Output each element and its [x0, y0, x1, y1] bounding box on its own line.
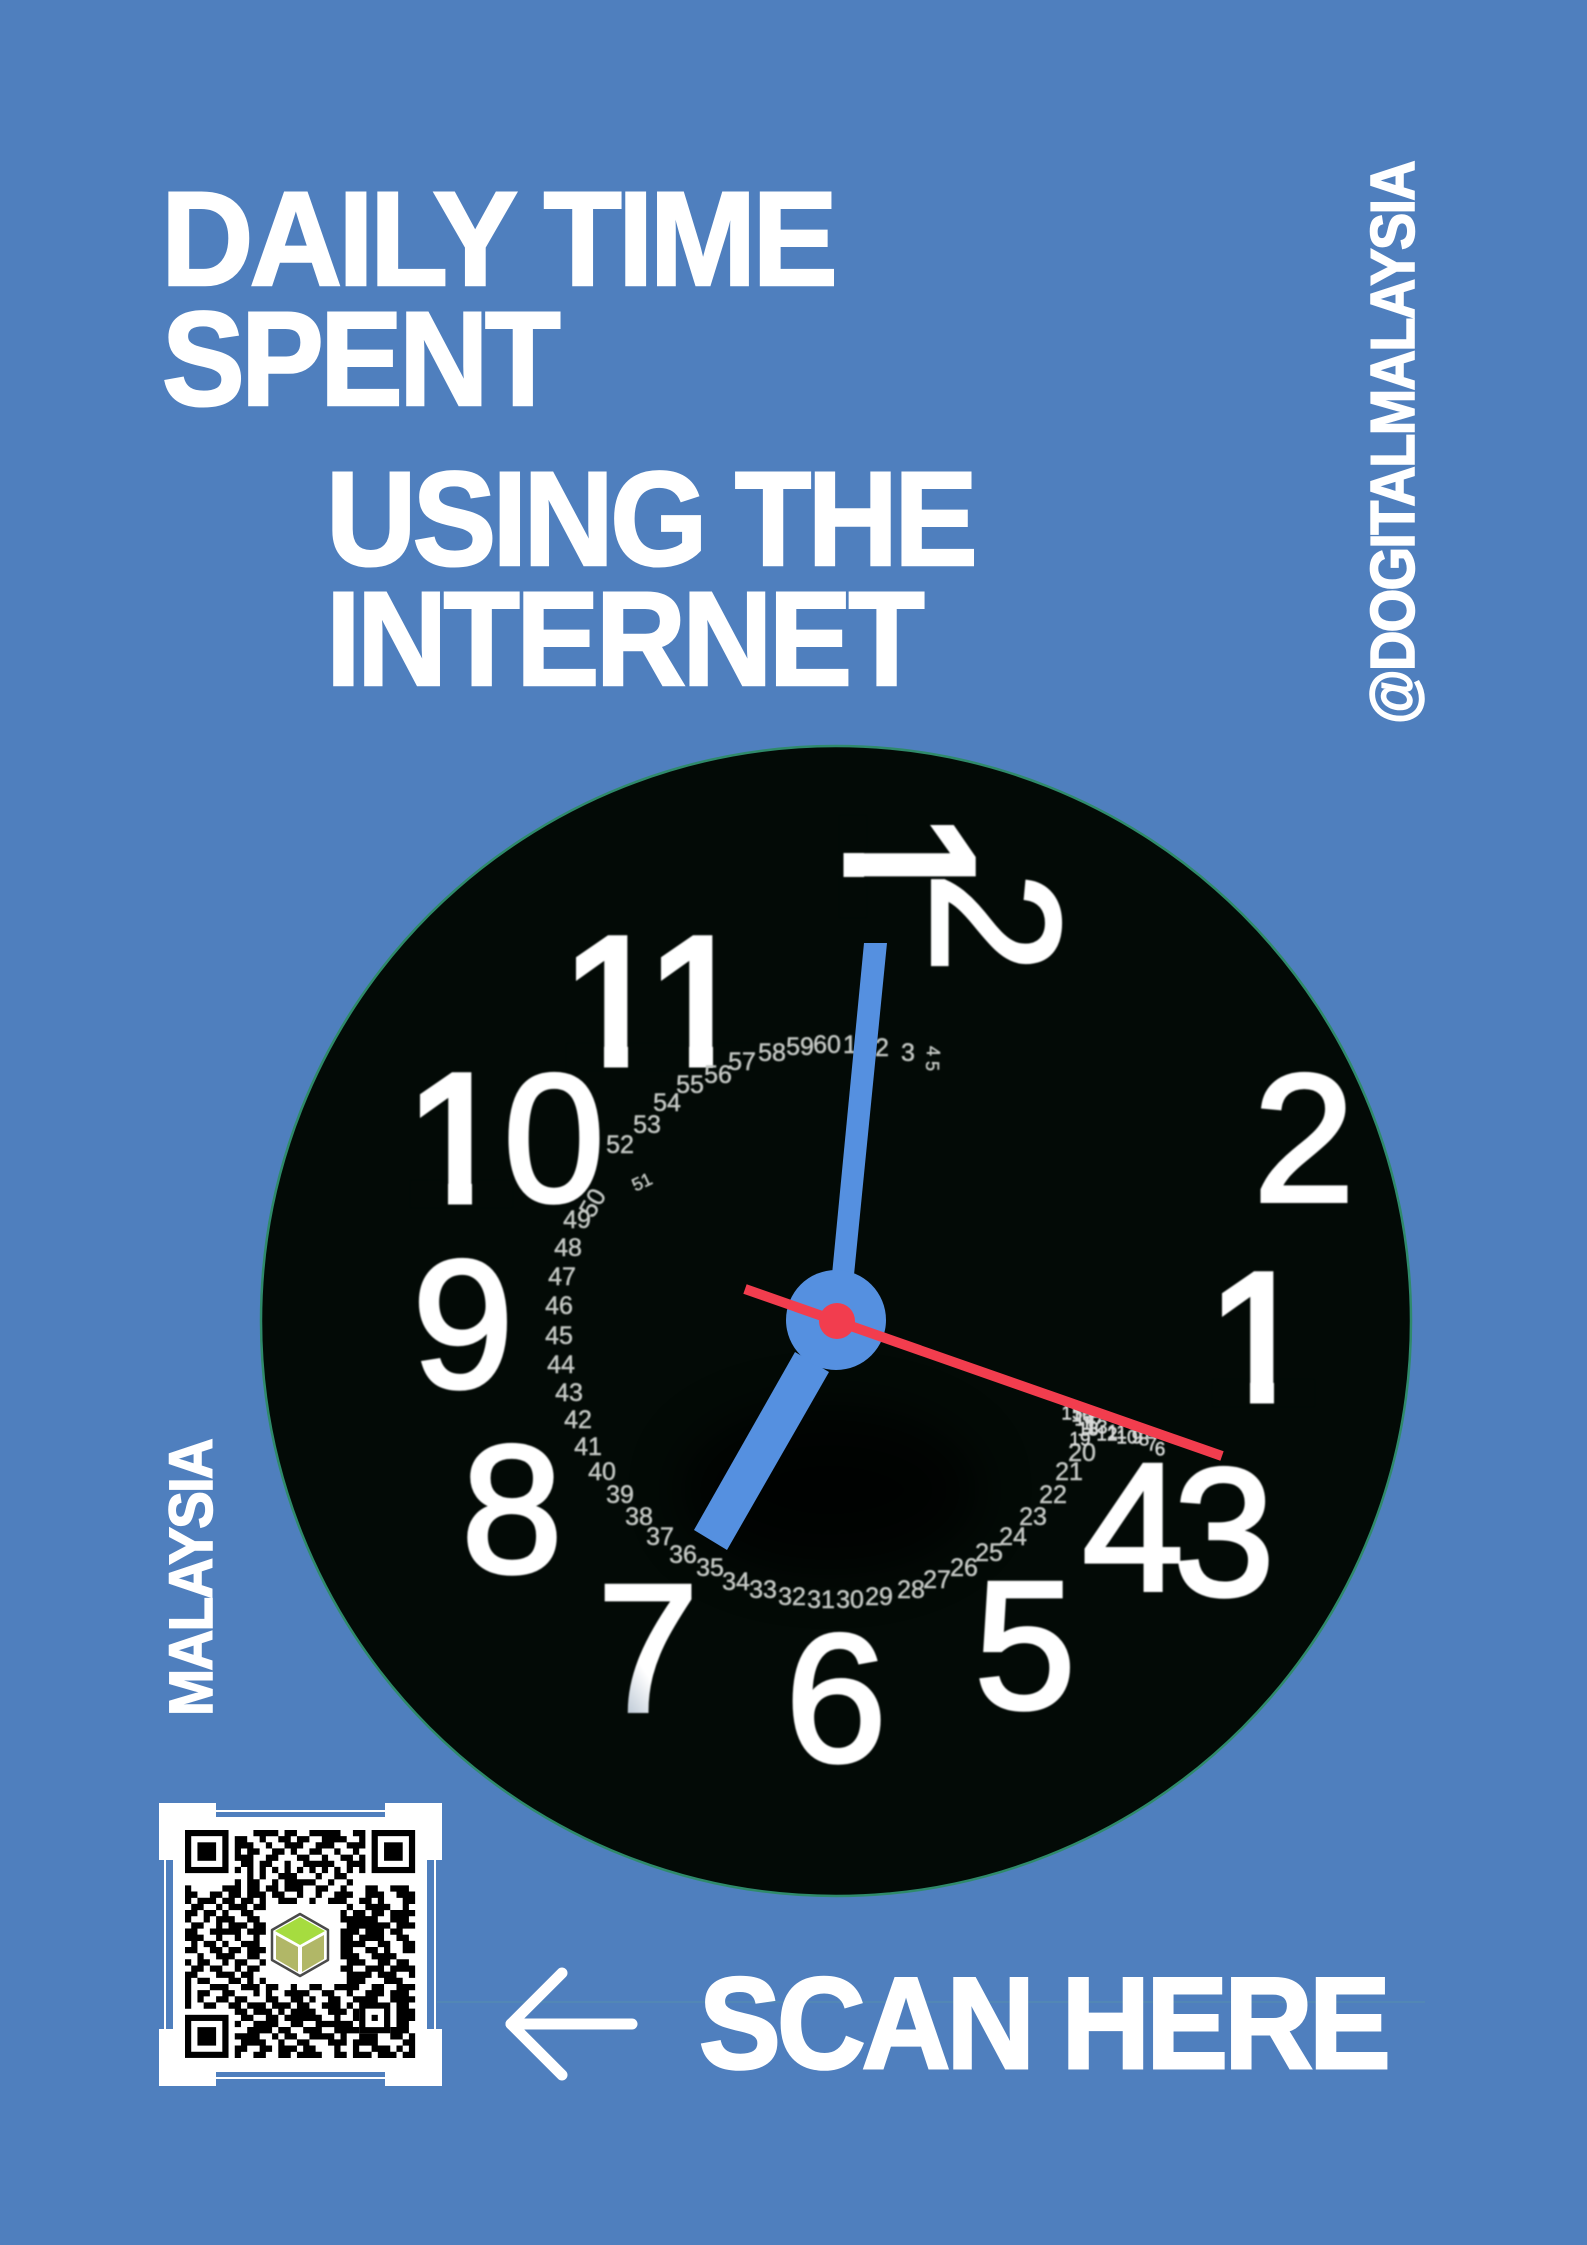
QR code [159, 1803, 442, 2086]
large hour numerals: 2 [1253, 1036, 1355, 1240]
minute ring numerals: 25 [975, 1539, 1003, 1567]
minute ring numerals: 49 [563, 1206, 591, 1234]
large hour numerals: 4 [1082, 1425, 1184, 1629]
title: using the internet: USING THE [326, 445, 974, 594]
large hour numerals: 9 [412, 1222, 514, 1426]
large hour numerals: 2 [894, 872, 1098, 973]
centre pin [819, 1303, 855, 1339]
minute ring numerals: 45 [545, 1322, 573, 1350]
minute ring numerals: 31 [807, 1586, 835, 1614]
minute ring numerals: 28 [897, 1576, 925, 1604]
large hour numerals: 1 [406, 1036, 507, 1240]
minute ring numerals: 48 [554, 1234, 582, 1262]
minute ring numerals: 6 [1155, 1440, 1165, 1460]
minute ring numerals: 38 [625, 1503, 653, 1531]
clock [261, 746, 1411, 1896]
large hour numerals: 3 [1173, 1430, 1275, 1634]
large hour numerals [406, 811, 1355, 1800]
minute ring numerals: 12 [1096, 1424, 1118, 1446]
minute ring numerals: 10 [1116, 1428, 1138, 1448]
large hour numerals: 0 [503, 1036, 605, 1240]
minute hand [831, 943, 887, 1285]
minute ring numerals: 41 [574, 1433, 602, 1461]
minute ring numerals: 18 [1077, 1420, 1099, 1440]
minute ring numerals: 8 [1139, 1430, 1149, 1450]
minute ring numerals: 9 [1132, 1428, 1142, 1448]
minute ring numerals: 17 [1081, 1414, 1103, 1434]
large hour numerals: 1 [1208, 1235, 1309, 1439]
minute ring numerals: 22 [1039, 1481, 1067, 1509]
large hour numerals: 1 [808, 811, 1012, 912]
minute ring numerals: 50 [574, 1184, 612, 1222]
minute ring numerals: 59 [786, 1033, 814, 1061]
clock face [261, 746, 1411, 1896]
hour hand [694, 1352, 829, 1550]
minute ring numerals: 52 [606, 1131, 634, 1159]
vertical handle text: @DOGITALMALAYSIA [1359, 161, 1428, 724]
minute ring numerals: 36 [669, 1541, 697, 1569]
large hour numerals: 8 [461, 1407, 563, 1611]
minute ring numerals: 42 [564, 1406, 592, 1434]
minute ring numerals: 34 [722, 1568, 750, 1596]
minute ring numerals: 29 [865, 1583, 893, 1611]
minute ring numerals: 44 [547, 1351, 575, 1379]
minute ring numerals: 37 [646, 1523, 674, 1551]
title: daily time spent [161, 165, 834, 434]
title: daily time spent: SPENT [162, 285, 560, 434]
minute ring numerals: 54 [653, 1089, 681, 1117]
minute ring numerals: 4 [923, 1046, 943, 1056]
minute ring numerals: 11 [1107, 1422, 1127, 1444]
minute ring numerals: 23 [1019, 1503, 1047, 1531]
arrow pointing to QR code [511, 1973, 632, 2075]
minute ring numerals: 51 [629, 1169, 655, 1195]
minute ring numerals: 40 [588, 1458, 616, 1486]
minute ring numerals: 60 [813, 1031, 841, 1059]
minute ring numerals: 56 [704, 1061, 732, 1089]
large hour numerals: 6 [785, 1596, 887, 1800]
minute ring numerals: 30 [836, 1586, 864, 1614]
minute ring numerals: 15 [1061, 1404, 1083, 1424]
minute ring numerals: 32 [778, 1583, 806, 1611]
minute ring numerals: 33 [749, 1576, 777, 1604]
minute ring numerals: 27 [923, 1566, 951, 1594]
minute ring numerals: 55 [676, 1071, 704, 1099]
minute ring numerals: 39 [606, 1481, 634, 1509]
large hour numerals: 5 [974, 1543, 1076, 1747]
minute ring numerals: 5 [922, 1061, 942, 1071]
minute ring numerals: 26 [950, 1554, 978, 1582]
vertical country label: MALAYSIA [157, 1439, 225, 1716]
minute ring numerals: 13 [1086, 1418, 1108, 1438]
minute ring numerals: 7 [1147, 1434, 1157, 1456]
minute ring numerals: 47 [548, 1263, 576, 1291]
minute ring numerals: 1 [843, 1031, 857, 1059]
minute ring numerals: 14 [1074, 1410, 1096, 1430]
scan here call to action: SCAN HERE [699, 1950, 1387, 2096]
minute ring numerals: 46 [545, 1292, 573, 1320]
minute ring numerals: 53 [633, 1111, 661, 1139]
second hand [745, 1289, 1222, 1456]
QR modules [185, 1833, 415, 2055]
minute ring numerals: 43 [555, 1379, 583, 1407]
minute ring numerals: 20 [1068, 1439, 1096, 1467]
faint guide line [437, 2001, 1425, 2003]
QR logo: green cube [267, 1908, 337, 1980]
hub [786, 1270, 886, 1370]
QR frame [159, 1803, 442, 2086]
minute ring numerals: 21 [1055, 1458, 1083, 1486]
title: using the internet: INTERNET [326, 565, 924, 714]
minute ring numerals: 58 [758, 1039, 786, 1067]
minute ring numerals: 24 [999, 1523, 1027, 1551]
title: using the internet [326, 445, 974, 714]
minute ring numerals: 35 [696, 1554, 724, 1582]
minute ring numerals: 2 [875, 1034, 889, 1062]
minute ring numerals: 57 [728, 1048, 756, 1076]
minute ring numerals [545, 1031, 1165, 1614]
minute ring numerals: 19 [1069, 1430, 1091, 1450]
title: daily time spent: DAILY TIME [161, 165, 834, 314]
large hour numerals: 11 [562, 899, 748, 1103]
large hour numerals: 7 [597, 1546, 699, 1750]
minute ring numerals: 3 [901, 1039, 915, 1067]
minute ring numerals: 16 [1071, 1406, 1093, 1426]
